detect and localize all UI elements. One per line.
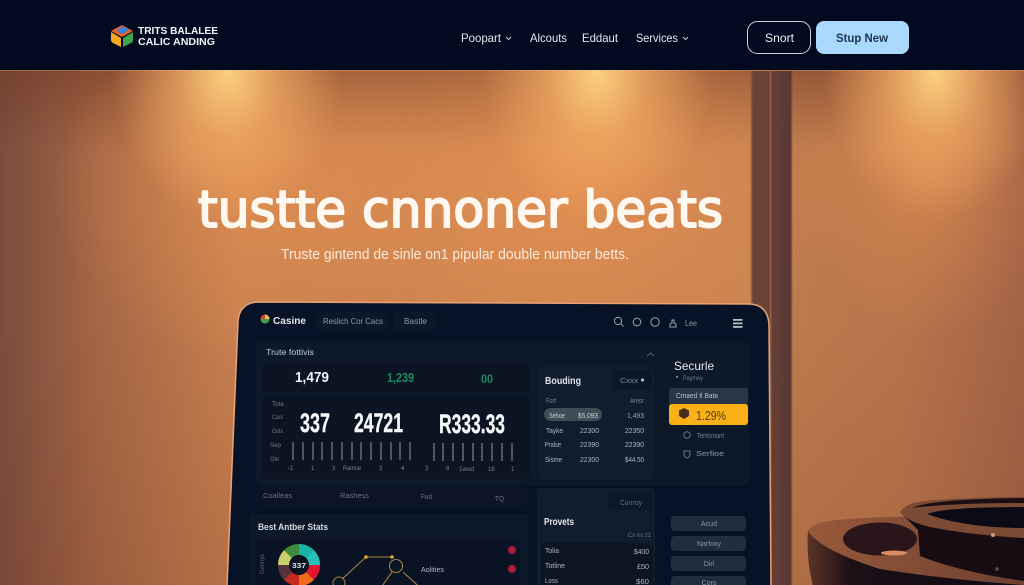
panel: provets: Tolia [545, 546, 560, 555]
panel: best number stats: Gennys [260, 554, 266, 574]
chart panel: 337 [300, 408, 330, 438]
panel: provets: Provets [544, 517, 574, 528]
icon: colored cube [111, 25, 133, 47]
chart panel: Ramse [343, 466, 362, 472]
highlight: yellow value: 1.29% [696, 408, 726, 423]
dashboard header: Reslich Cor Cacs [323, 317, 383, 326]
bars [293, 442, 512, 461]
chart panel: 1 [311, 466, 315, 472]
panel: provets: Cx nx z1 [628, 532, 651, 539]
panel: bouding table: 22300 [580, 455, 599, 464]
panel: provets: $400 [634, 547, 649, 556]
chart panel: 3 [332, 466, 336, 472]
tabs row: TQ [495, 494, 504, 503]
chart panel: R333.33 [439, 409, 505, 439]
panel: bouding table: Cxxx [620, 378, 639, 385]
action buttons: Acud [701, 521, 717, 528]
logo: CALIC ANDING [138, 37, 215, 48]
panel: trade stats: 1,479 [295, 369, 329, 386]
dashboard header: Bastle [404, 317, 428, 326]
panel: best number stats: 337 [292, 561, 306, 570]
navigation links: Poopart [461, 31, 502, 45]
action buttons: Dirl [704, 561, 715, 568]
chart panel: Ote [270, 457, 280, 463]
line graph [333, 555, 425, 585]
panel: best number stats: Best Antber Stats [258, 522, 328, 533]
chart panel: 24721 [354, 408, 403, 438]
icon: shield item: Serfioe [696, 451, 724, 458]
icon: casino logo [260, 314, 270, 324]
tabs row: Coalleas [263, 491, 292, 500]
top navigation bar [0, 0, 1024, 71]
laptop dashboard [227, 302, 771, 585]
icon: settings item: Tentsmunt [697, 433, 724, 440]
dashboard header: Lee [685, 319, 697, 328]
button: Stup New: Stup New [836, 31, 889, 45]
navigation links: Alcouts [530, 31, 567, 45]
panel: bouding table: 22390 [580, 440, 599, 449]
chart panel: Cars [272, 415, 283, 421]
button: Snort [748, 22, 810, 54]
panel: best number stats: Aolities [421, 565, 444, 574]
dashboard header [260, 312, 742, 331]
panel: secure sidebar [669, 359, 748, 458]
icon: menu [733, 319, 742, 328]
panel: bouding table: Tayke [546, 426, 563, 435]
chart panel: 8 [446, 466, 450, 472]
button: Stup New [816, 21, 909, 54]
chart panel: 3 [425, 466, 429, 472]
wall pillar [750, 71, 793, 585]
panel: trade stats [262, 347, 530, 479]
panel: secure sidebar: Securle [674, 359, 714, 373]
panel: trade stats: Trute fottivis [266, 347, 314, 357]
tabs row: Rashess [340, 491, 369, 500]
chart panel: 4 [401, 466, 405, 472]
panel: secure sidebar: Cmaed tl Bata [676, 393, 718, 400]
panel: bouding table: 22350 [625, 426, 644, 435]
panel: bouding table: Areor [630, 398, 645, 405]
panel: bouding table: Sisme [545, 455, 562, 464]
panel: provets: Totline [545, 561, 565, 570]
title: tustte cnnoner beats [198, 181, 723, 240]
icon: collapse caret [647, 353, 654, 356]
panel: provets: £50 [637, 562, 649, 571]
subtitle: Truste gintend de sinle on1 pipular double number betts. [281, 247, 629, 263]
panel: provets: Currroy [620, 500, 642, 507]
panel: bouding table: 22390 [625, 440, 644, 449]
panel: provets [537, 488, 655, 585]
panel: bouding table [538, 366, 654, 480]
chart panel: -1 [288, 466, 294, 472]
tabs row: Fwd [421, 492, 432, 501]
dashboard header: Casine [273, 315, 306, 327]
panel: trade stats: 1,239 [387, 370, 414, 385]
header icons [614, 317, 676, 327]
navigation links [461, 31, 688, 45]
chart panel: Tote [272, 402, 285, 408]
decorative metal bowl object [808, 497, 1024, 585]
button: Snort: Snort [765, 31, 795, 45]
chart panel [262, 397, 530, 479]
panel: trade stats: 00 [481, 372, 493, 386]
panel: secure sidebar: Paymey [683, 375, 704, 382]
main panel [256, 341, 749, 486]
panel: bouding table: $44.50 [625, 455, 644, 464]
panel: provets: Loss [545, 576, 558, 585]
tabs row [256, 487, 528, 506]
panel: bouding table: Fort [546, 398, 556, 405]
action buttons: Narfoxy [697, 541, 722, 548]
chart panel: 3 [379, 466, 383, 472]
chart panel: 1wod [459, 467, 474, 473]
action buttons [671, 516, 746, 585]
chart panel: 1 [511, 467, 515, 473]
navigation links: Services [636, 31, 678, 45]
highlighted row: Sehoe [549, 413, 565, 420]
highlighted row: $5,093 [578, 413, 598, 420]
chart panel: 18 [488, 467, 495, 473]
panel: bouding table: Pralse [545, 440, 561, 449]
icon: red badges [508, 546, 516, 573]
chart panel: Sep [270, 443, 282, 449]
logo [111, 25, 218, 48]
panel: best number stats [250, 514, 528, 585]
highlighted row [544, 408, 644, 421]
chart panel: Osts [272, 429, 283, 435]
logo: TRITS BALALEE [138, 26, 218, 37]
donut chart [283, 549, 315, 581]
panel: bouding table: Bouding [545, 376, 581, 387]
panel: bouding table: 22300 [580, 426, 599, 435]
highlighted row: 1,493 [627, 413, 644, 420]
navigation links: Eddaut [582, 31, 619, 45]
